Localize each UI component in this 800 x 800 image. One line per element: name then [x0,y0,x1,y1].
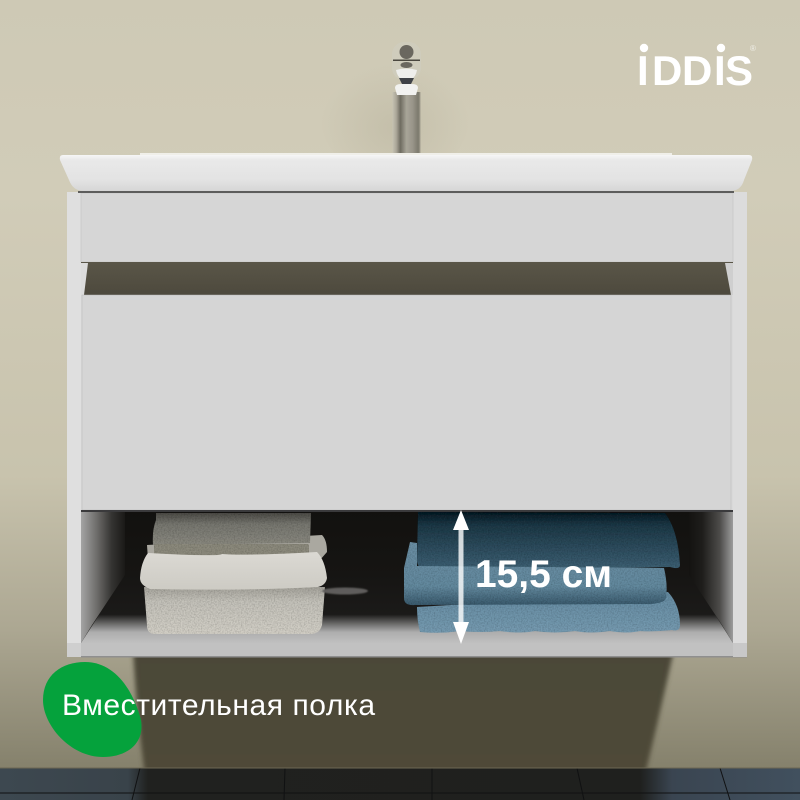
floor tiles [0,768,800,800]
basket rear rim [147,535,327,560]
faucet body [392,92,420,155]
gap behind drawer [81,262,733,295]
logo wordmark: I [637,47,649,94]
vanity cabinet [67,192,747,658]
registered mark: ® [750,44,756,53]
drawer front [82,295,731,510]
cabinet body [67,192,747,657]
middle towel [404,542,667,605]
green blob badge [43,662,142,757]
gray towel upper [153,513,311,545]
shelf front lip [67,643,747,658]
top towel [417,512,680,571]
faucet head [392,42,421,95]
left inner wall [81,510,125,643]
right side panel [733,192,747,657]
basket with gray towels [140,513,327,634]
height label: 15,5 см [475,553,612,596]
light reflection on shelf [322,588,368,594]
logo wordmark: I [714,47,726,94]
logo wordmark: S [725,47,753,94]
drawer underside shadow [81,510,733,512]
logo wordmark: D [682,47,712,94]
faucet shadow on wall [320,50,470,180]
open shelf niche [81,510,733,643]
left side panel [67,192,81,657]
faucet [392,42,421,155]
gray towel lower [154,544,309,555]
sink [60,153,752,193]
blue towels [404,512,680,633]
shelf surface [81,575,733,643]
basket lower body [144,587,325,634]
height dimension arrow [453,510,469,644]
brand logo [637,44,756,94]
caption: Вместительная полка [62,689,375,722]
basket folded cuff [140,552,327,590]
logo wordmark: D [652,47,682,94]
upper fascia [81,193,733,262]
right inner wall [689,510,733,643]
cabinet shadow on wall [133,650,674,775]
bottom towel [417,592,680,633]
